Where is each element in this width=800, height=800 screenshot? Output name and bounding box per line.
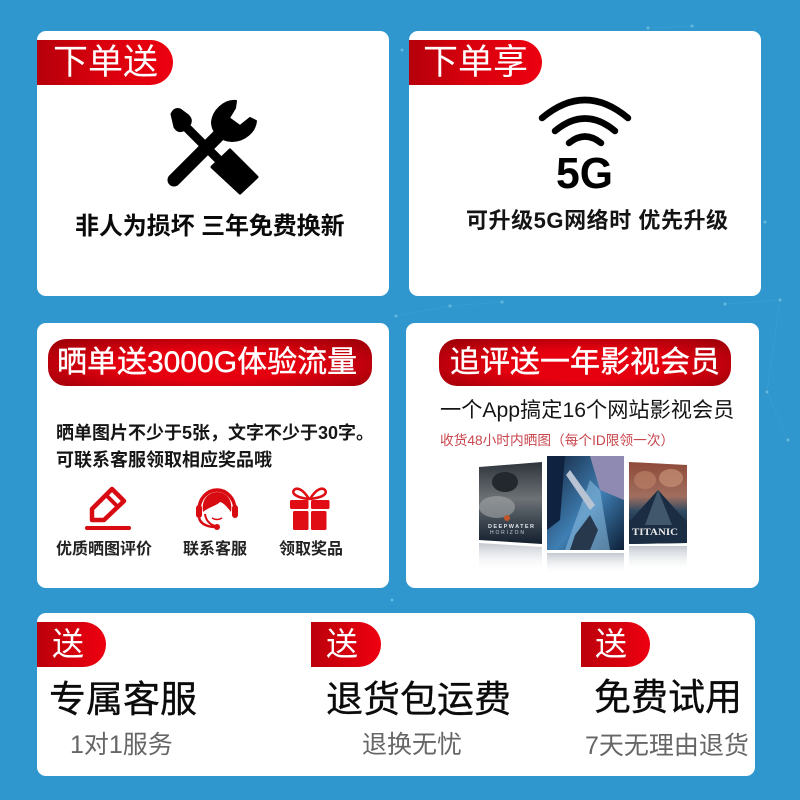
subtitle: 退换无忧 (362, 731, 462, 759)
text: 5G upgrade priority: 可升级5G网络时 优先升级 (466, 208, 729, 233)
tag: order gift (37, 40, 173, 85)
text: red note: 收货48小时内晒图（每个ID限领一次） (440, 433, 674, 448)
poster left (479, 462, 542, 572)
tag: gift (37, 622, 106, 667)
label: 联系客服 (183, 541, 247, 558)
subtitle: 1对1服务 (70, 731, 173, 759)
icon: pencil (85, 486, 131, 530)
title: 免费试用 (594, 677, 742, 718)
poster left: DEEPWATER (488, 524, 534, 530)
title: 专属客服 (49, 679, 197, 720)
text: free replacement: 非人为损坏 三年免费换新 (75, 213, 344, 240)
icon: 5G signal (538, 96, 632, 195)
tag: gift: 送 (595, 626, 627, 662)
panel: video membership (406, 323, 759, 588)
tag: order enjoy (409, 40, 542, 85)
step: quality review (56, 486, 152, 558)
icon: headset agent (196, 488, 238, 530)
tag: gift (581, 622, 650, 667)
panel: review gift data (37, 323, 389, 588)
panel: bottom services (37, 613, 755, 776)
icon: crossed wrench and screwdriver (168, 100, 259, 195)
subtitle: 7天无理由退货 (585, 732, 749, 760)
heading pill: membership: 追评送一年影视会员 (450, 346, 720, 379)
tag: order enjoy: 下单享 (423, 43, 528, 82)
text: review rules (56, 423, 374, 470)
heading pill: membership (439, 339, 731, 386)
heading pill: 3000G data: 晒单送3000G体验流量 (57, 346, 357, 379)
panel: order gift, three-year replacement (37, 31, 389, 296)
poster right: TITANIC (632, 527, 678, 537)
tag: gift (311, 622, 381, 667)
label: 领取奖品 (279, 541, 343, 558)
icon: gift box (290, 487, 330, 530)
tag: gift: 送 (52, 626, 84, 662)
title: 退货包运费 (326, 679, 511, 720)
step: claim prize (279, 487, 343, 558)
service: free returns (311, 622, 511, 759)
text: review rules: 晒单图片不少于5张，文字不少于30字。 (56, 423, 374, 443)
tag: gift: 送 (326, 626, 358, 662)
service: free trial (581, 622, 749, 760)
heading pill: 3000G data (48, 339, 372, 386)
poster middle (547, 456, 624, 575)
step: contact service (183, 488, 247, 558)
tag: order gift: 下单送 (53, 43, 158, 82)
text: review rules: 可联系客服领取相应奖品哦 (56, 450, 272, 470)
text: one app: 一个App搞定16个网站影视会员 (440, 399, 734, 422)
posters (479, 456, 687, 567)
service: dedicated support (37, 622, 197, 759)
poster left: HORIZON (490, 530, 524, 536)
label: 优质晒图评价 (56, 541, 152, 558)
panel: 5G upgrade (409, 31, 761, 296)
poster right (629, 462, 687, 572)
